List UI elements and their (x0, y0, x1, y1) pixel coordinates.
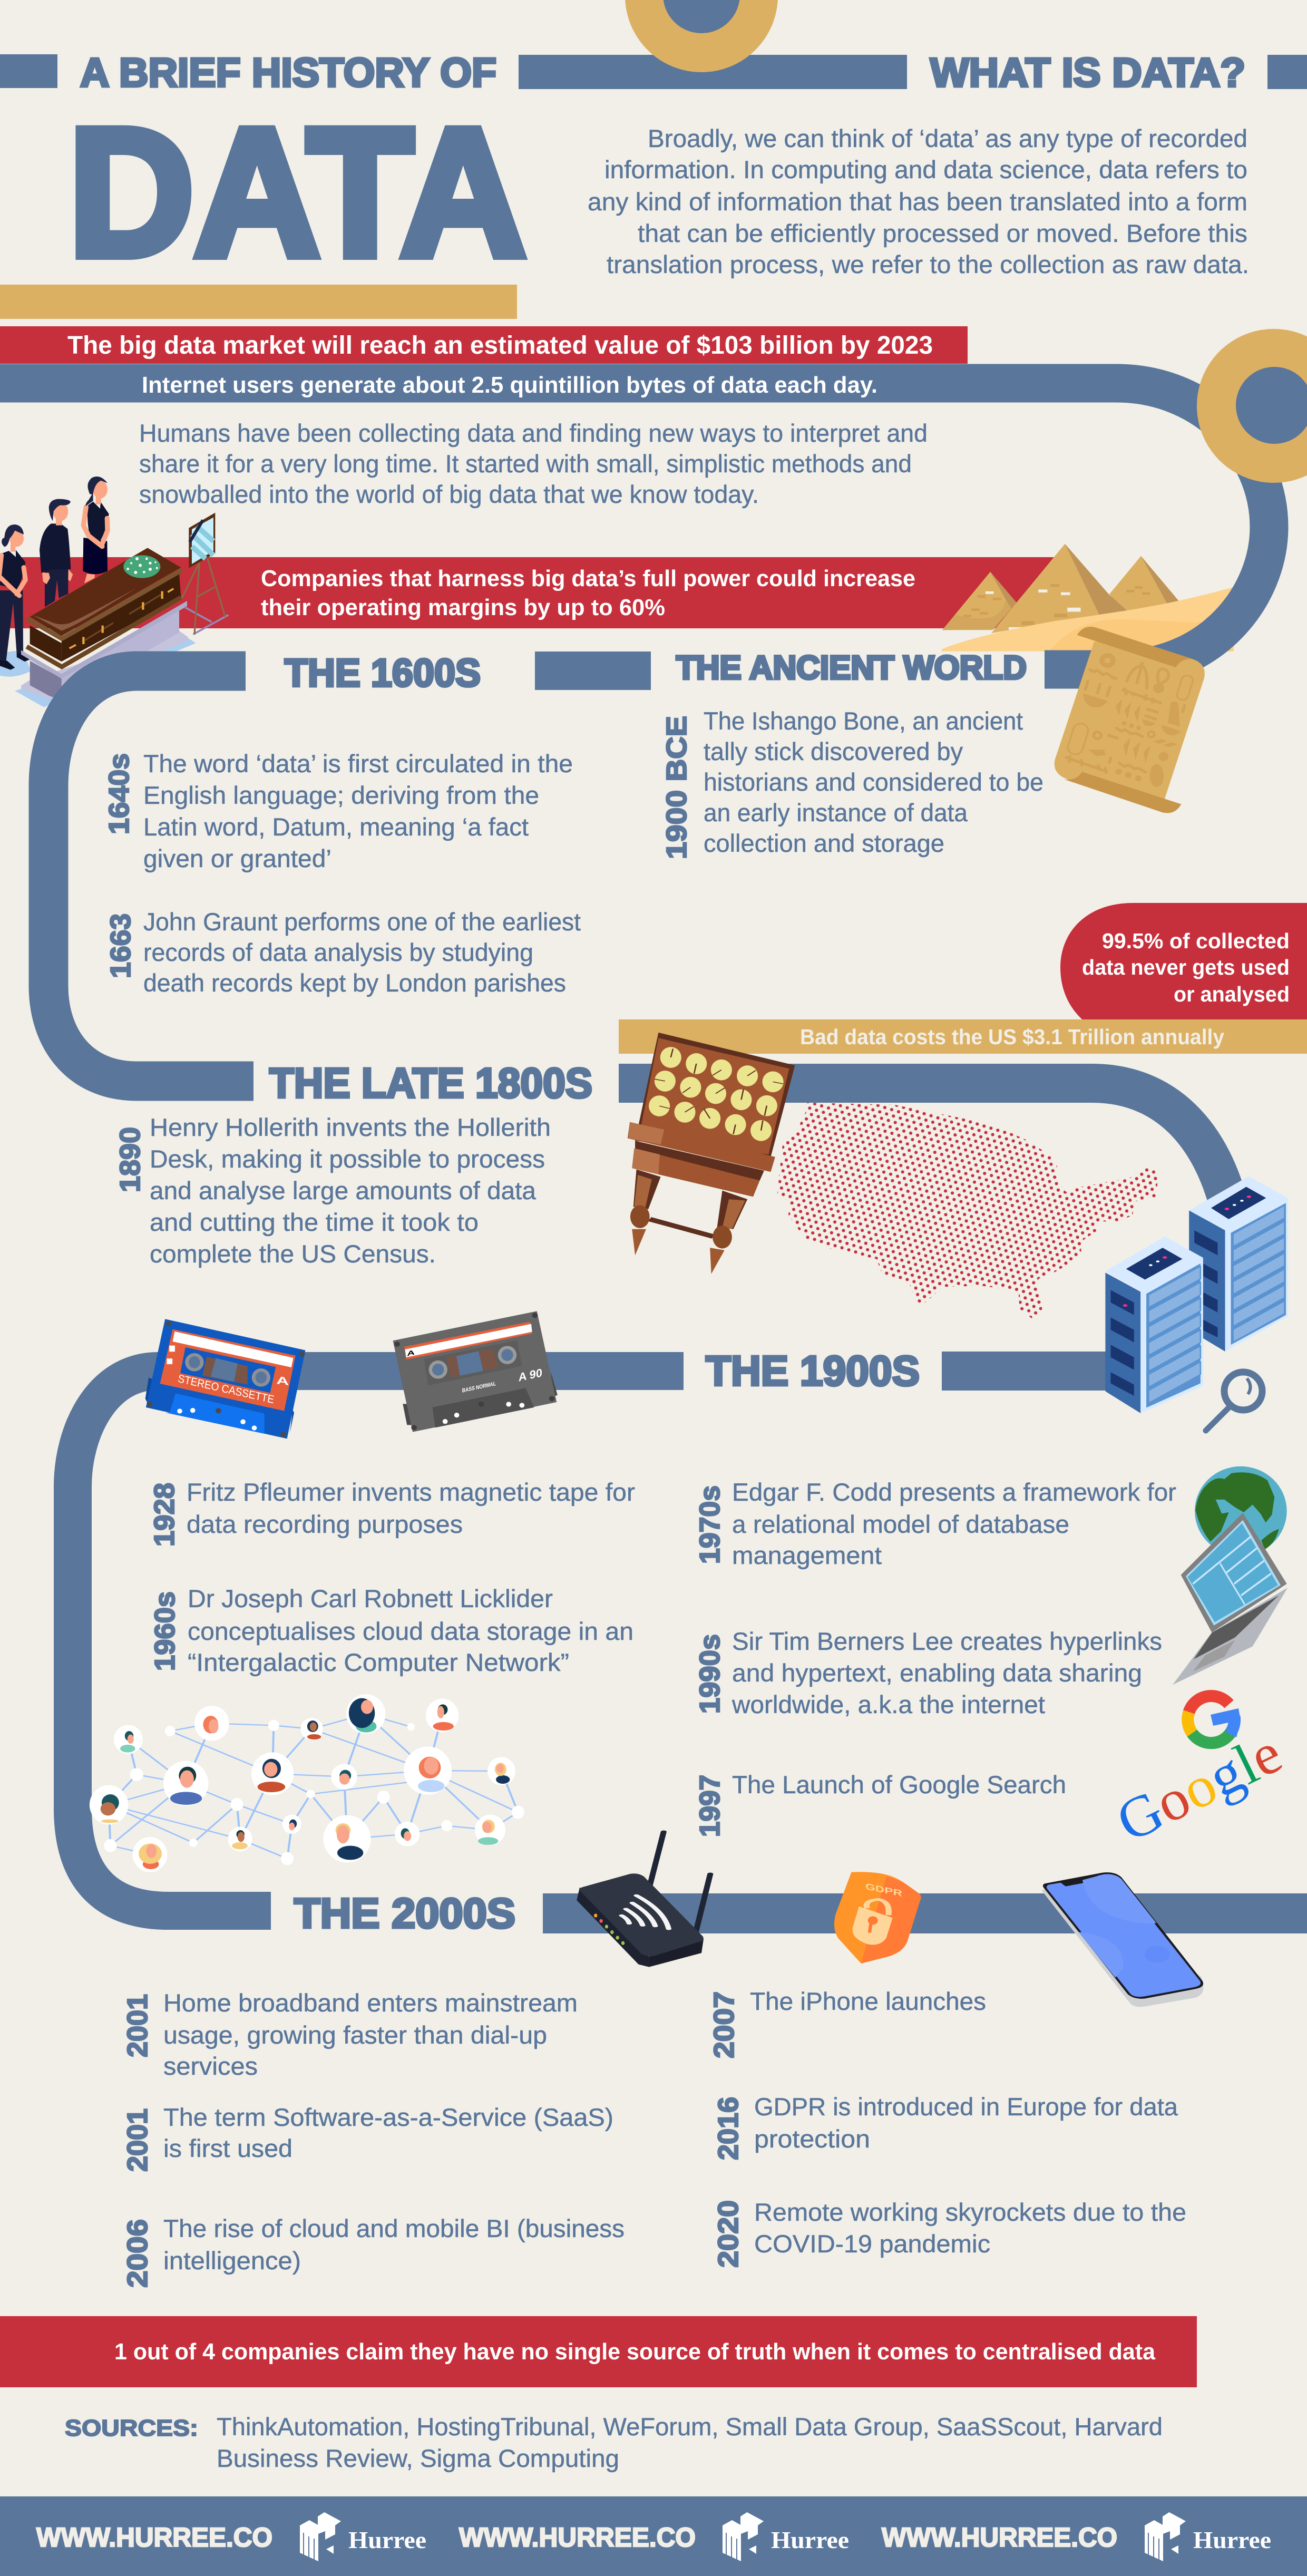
year: 2006: 2006 (122, 2219, 153, 2288)
heading: what is data: WHAT IS DATA? (930, 50, 1245, 95)
network avatars: hair (102, 1698, 506, 1864)
text block: 1640s: given or granted’ (143, 844, 331, 872)
text block: 1990s (731, 1627, 1162, 1718)
text block: what is data: that can be efficiently processed or moved. Before this (638, 219, 1247, 247)
footer logo 1: Hurree (348, 2526, 426, 2553)
year: 2007: 2007 (708, 1991, 740, 2058)
text block: 1640s (143, 750, 573, 872)
illustration: grey cassette (393, 1311, 558, 1432)
pedestal (21, 601, 188, 700)
footer logo 2: Hurree (771, 2526, 849, 2553)
text block: broadband (163, 1989, 578, 2080)
text block: remote working: COVID-19 pandemic (754, 2230, 990, 2258)
left server tower (1105, 1237, 1203, 1413)
text block: 1928 (187, 1478, 635, 1538)
illustration: people network (90, 1694, 524, 1872)
network avatars: shirts (101, 1720, 510, 1869)
illustration: blue cassette: STEREO CASSETTE (177, 1372, 275, 1406)
network links (109, 1714, 518, 1859)
text block: broadband: services (163, 2052, 258, 2080)
heading: the 2000s: THE 2000S (294, 1890, 515, 1937)
text block: hollerith: Henry Hollerith invents the Hollerith (150, 1113, 551, 1141)
text block: what is data: translation process, we refer to the collection as raw data. (607, 250, 1249, 278)
heading: the 1600s: THE 1600S (285, 651, 481, 695)
header bars (0, 54, 1307, 89)
text block: 1663: death records kept by London parishes (143, 969, 566, 997)
year: 1900 BCE: 1900 BCE (661, 716, 692, 859)
text block: 1640s: English language; deriving from the (143, 781, 539, 809)
bar: the 2000s right (543, 1893, 1307, 1933)
illustration: grey cassette: A 90 (519, 1366, 542, 1384)
text block: intro: snowballed into the world of big data that we know today. (139, 480, 759, 508)
sources: ThinkAutomation, HostingTribunal, WeForum, Small Data Group, SaaSScout, Harvard (217, 2413, 1163, 2441)
icon: top gold ring (625, 0, 778, 72)
text block: gdpr (754, 2093, 1178, 2153)
year: 2001 saas: 2001 (122, 2108, 153, 2172)
footer (0, 2496, 1307, 2576)
text block: 1640s: Latin word, Datum, meaning ‘a fact (143, 813, 529, 841)
text block: what is data: information. In computing and data science, data refers to (604, 155, 1247, 183)
text block: hollerith (150, 1113, 551, 1268)
text block: ancient world: The Ishango Bone, an ancient (704, 707, 1023, 735)
funeral illustration: mourners and coffin (0, 477, 228, 707)
text block: hollerith: and analyse large amounts of data (150, 1177, 537, 1204)
footer logo 3: Hurree (1193, 2526, 1271, 2553)
text block: gdpr: protection (754, 2125, 870, 2153)
illustration: data servers (1105, 1177, 1288, 1413)
text block: 1997: The Launch of Google Search (732, 1771, 1066, 1799)
year: 1997: 1997 (694, 1775, 726, 1837)
text block: 1970s: Edgar F. Codd presents a framework for (732, 1478, 1176, 1506)
title: DATA: DATA (69, 91, 526, 294)
icon: right gold ring (1197, 329, 1307, 483)
year: 1970s: 1970s (694, 1485, 726, 1564)
text block: ancient world: historians and considered to be (704, 768, 1043, 796)
text block: remote working (754, 2198, 1186, 2258)
text block: iphone: The iPhone launches (750, 1987, 986, 2015)
footer url 1: WWW.HURREE.CO (36, 2522, 272, 2552)
text block: 1663: records of data analysis by studying (143, 938, 533, 966)
footer url 3: WWW.HURREE.CO (882, 2522, 1117, 2552)
text block: 1990s: worldwide, a.k.a the internet (731, 1690, 1045, 1718)
callout: market value (0, 326, 968, 364)
year: 1960s: 1960s (149, 1591, 181, 1671)
illustration: blue cassette (145, 1319, 305, 1438)
footer url 2: WWW.HURREE.CO (459, 2522, 696, 2552)
text block: broadband: usage, growing faster than dial-up (163, 2021, 547, 2049)
divider bar: ancient world left (535, 652, 651, 690)
icon: google g (1188, 1696, 1241, 1743)
illustration: blue cassette: A (276, 1374, 289, 1387)
text block: 1990s: and hypertext, enabling data sharing (732, 1659, 1142, 1687)
year: 1990s: 1990s (694, 1634, 726, 1714)
year: 2001 broadband: 2001 (122, 1994, 153, 2057)
illustration: grey cassette: A (407, 1348, 415, 1358)
right mourner (83, 477, 109, 584)
timeline pipe: late 1800s to servers (619, 1083, 1231, 1212)
heading: the 1900s: THE 1900S (706, 1347, 920, 1394)
text block: gdpr: GDPR is introduced in Europe for data (754, 2093, 1178, 2121)
network avatars: faces (101, 1700, 504, 1858)
logo: google wordmark: Google (1107, 1720, 1291, 1854)
text block: 1928: Fritz Pfleumer invents magnetic tape for (187, 1478, 635, 1506)
text block: saas (163, 2103, 613, 2162)
text block: cloud bi: The rise of cloud and mobile BI (business (163, 2214, 625, 2242)
callout: single source of truth (0, 2316, 1197, 2387)
timeline pipe: 1600s to late 1800s (48, 671, 253, 1081)
year: 1663: 1663 (105, 913, 136, 978)
text block: what is data (588, 124, 1249, 278)
illustration: globe (1195, 1466, 1287, 1556)
text block: ancient world: tally stick discovered by (704, 737, 963, 765)
year: 1640s: 1640s (103, 753, 135, 834)
sources: SOURCES: (65, 2415, 198, 2441)
illustration: papyrus scroll (1055, 627, 1205, 813)
text block: ancient world (704, 707, 1043, 857)
year: 1890: 1890 (114, 1127, 146, 1192)
text block: saas: The term Software-as-a-Service (SaaS) (163, 2103, 613, 2131)
text block: 1970s: a relational model of database (732, 1510, 1069, 1538)
text block: what is data: any kind of information that has been translated into a form (588, 188, 1247, 216)
callout: collected data never used (1060, 903, 1307, 1023)
text block: 1663: John Graunt performs one of the earliest (143, 908, 581, 936)
text block: intro (139, 419, 928, 508)
callout: single source of truth: 1 out of 4 companies claim they have no single source of truth when it comes to centralised data (114, 2339, 1156, 2365)
illustration: laptop (1173, 1513, 1288, 1685)
illustration: iphone (1042, 1872, 1203, 2007)
callout: bad data cost: Bad data costs the US $3.1 Trillion annually (800, 1025, 1224, 1049)
text block: broadband: Home broadband enters mainstream (163, 1989, 578, 2017)
footer logo 1 (300, 2512, 426, 2561)
text block: 1960s: “Intergalactic Computer Network” (188, 1648, 569, 1676)
text block: 1970s (732, 1478, 1176, 1569)
text block: intro: Humans have been collecting data and finding new ways to interpret and (139, 419, 928, 447)
text block: 1960s: Dr Joseph Carl Robnett Licklider (188, 1585, 553, 1612)
text block: cloud bi (163, 2214, 625, 2274)
icon: magnifying glass (1206, 1372, 1262, 1431)
callout: internet users: Internet users generate about 2.5 quintillion bytes of data each day. (142, 372, 877, 398)
text block: hollerith: complete the US Census. (150, 1240, 436, 1268)
network nodes (90, 1694, 524, 1872)
timeline pipe: 1900s to 2000s (73, 1371, 684, 1911)
text block: hollerith: and cutting the time it took to (150, 1208, 479, 1236)
right server tower (1189, 1177, 1288, 1352)
sources (65, 2413, 1163, 2472)
callout: market value: The big data market will reach an estimated value of $103 billion by 2023 (67, 332, 933, 359)
text block: hollerith: Desk, making it possible to process (150, 1145, 545, 1173)
text block: ancient world: an early instance of data (704, 799, 968, 827)
text block: 1928: data recording purposes (187, 1510, 463, 1538)
heading: the ancient world: THE ANCIENT WORLD (676, 649, 1027, 686)
heading: the late 1800s: THE LATE 1800S (269, 1059, 592, 1106)
text block: ancient world: collection and storage (704, 829, 944, 857)
callout: collected data never used: 99.5% of collected (1102, 929, 1290, 953)
middle mourner (40, 499, 73, 607)
illustration: wifi router (577, 1832, 710, 1967)
year: 2020: 2020 (713, 2200, 744, 2268)
footer logo 2 (723, 2512, 849, 2561)
text block: 1960s (188, 1585, 633, 1676)
year: 1928: 1928 (149, 1483, 180, 1547)
icon: gdpr padlock shield (834, 1872, 921, 1963)
text block: 1663 (143, 908, 581, 997)
coffin (27, 548, 182, 667)
callout: operating margins: their operating margins by up to 60% (261, 595, 665, 620)
text block: cloud bi: intelligence) (163, 2247, 301, 2274)
bars: the 1900s (942, 1352, 1121, 1391)
text block: saas: is first used (163, 2134, 292, 2162)
icon: gdpr padlock shield: GDPR (865, 1881, 902, 1899)
callout: collected data never used: data never gets used (1082, 955, 1290, 979)
callout: collected data never used: or analysed (1174, 982, 1290, 1006)
illustration: hollerith desk (628, 1033, 795, 1274)
callout: bad data cost (619, 1019, 1307, 1054)
left mourner (0, 524, 30, 670)
easel with portrait (182, 513, 228, 634)
map: dotted USA (777, 1103, 1159, 1319)
text block: 1960s: conceptualises cloud data storage in an (188, 1617, 633, 1645)
timeline pipe: intro to ancient world (0, 383, 1269, 669)
text block: 1970s: management (732, 1541, 882, 1569)
year: 2016: 2016 (713, 2097, 744, 2160)
sources: Business Review, Sigma Computing (217, 2444, 619, 2472)
callout: operating margins (0, 557, 1059, 628)
footer logo 3 (1145, 2512, 1271, 2561)
text block: what is data: Broadly, we can think of ‘data’ as any type of recorded (648, 124, 1247, 152)
text block: remote working: Remote working skyrockets due to the (754, 2198, 1186, 2226)
gold bar (0, 285, 517, 319)
heading: a brief history of: A BRIEF HISTORY OF (80, 50, 496, 95)
text block: intro: share it for a very long time. It started with small, simplistic methods and (139, 450, 912, 478)
text block: 1640s: The word ‘data’ is first circulated in the (143, 750, 573, 777)
illustration: pyramids and sand (942, 544, 1234, 652)
text block: 1990s: Sir Tim Berners Lee creates hyperlinks (732, 1627, 1162, 1655)
illustration: grey cassette: BASS NORMAL (462, 1381, 496, 1394)
callout: operating margins: Companies that harness big data’s full power could increase (261, 566, 915, 591)
